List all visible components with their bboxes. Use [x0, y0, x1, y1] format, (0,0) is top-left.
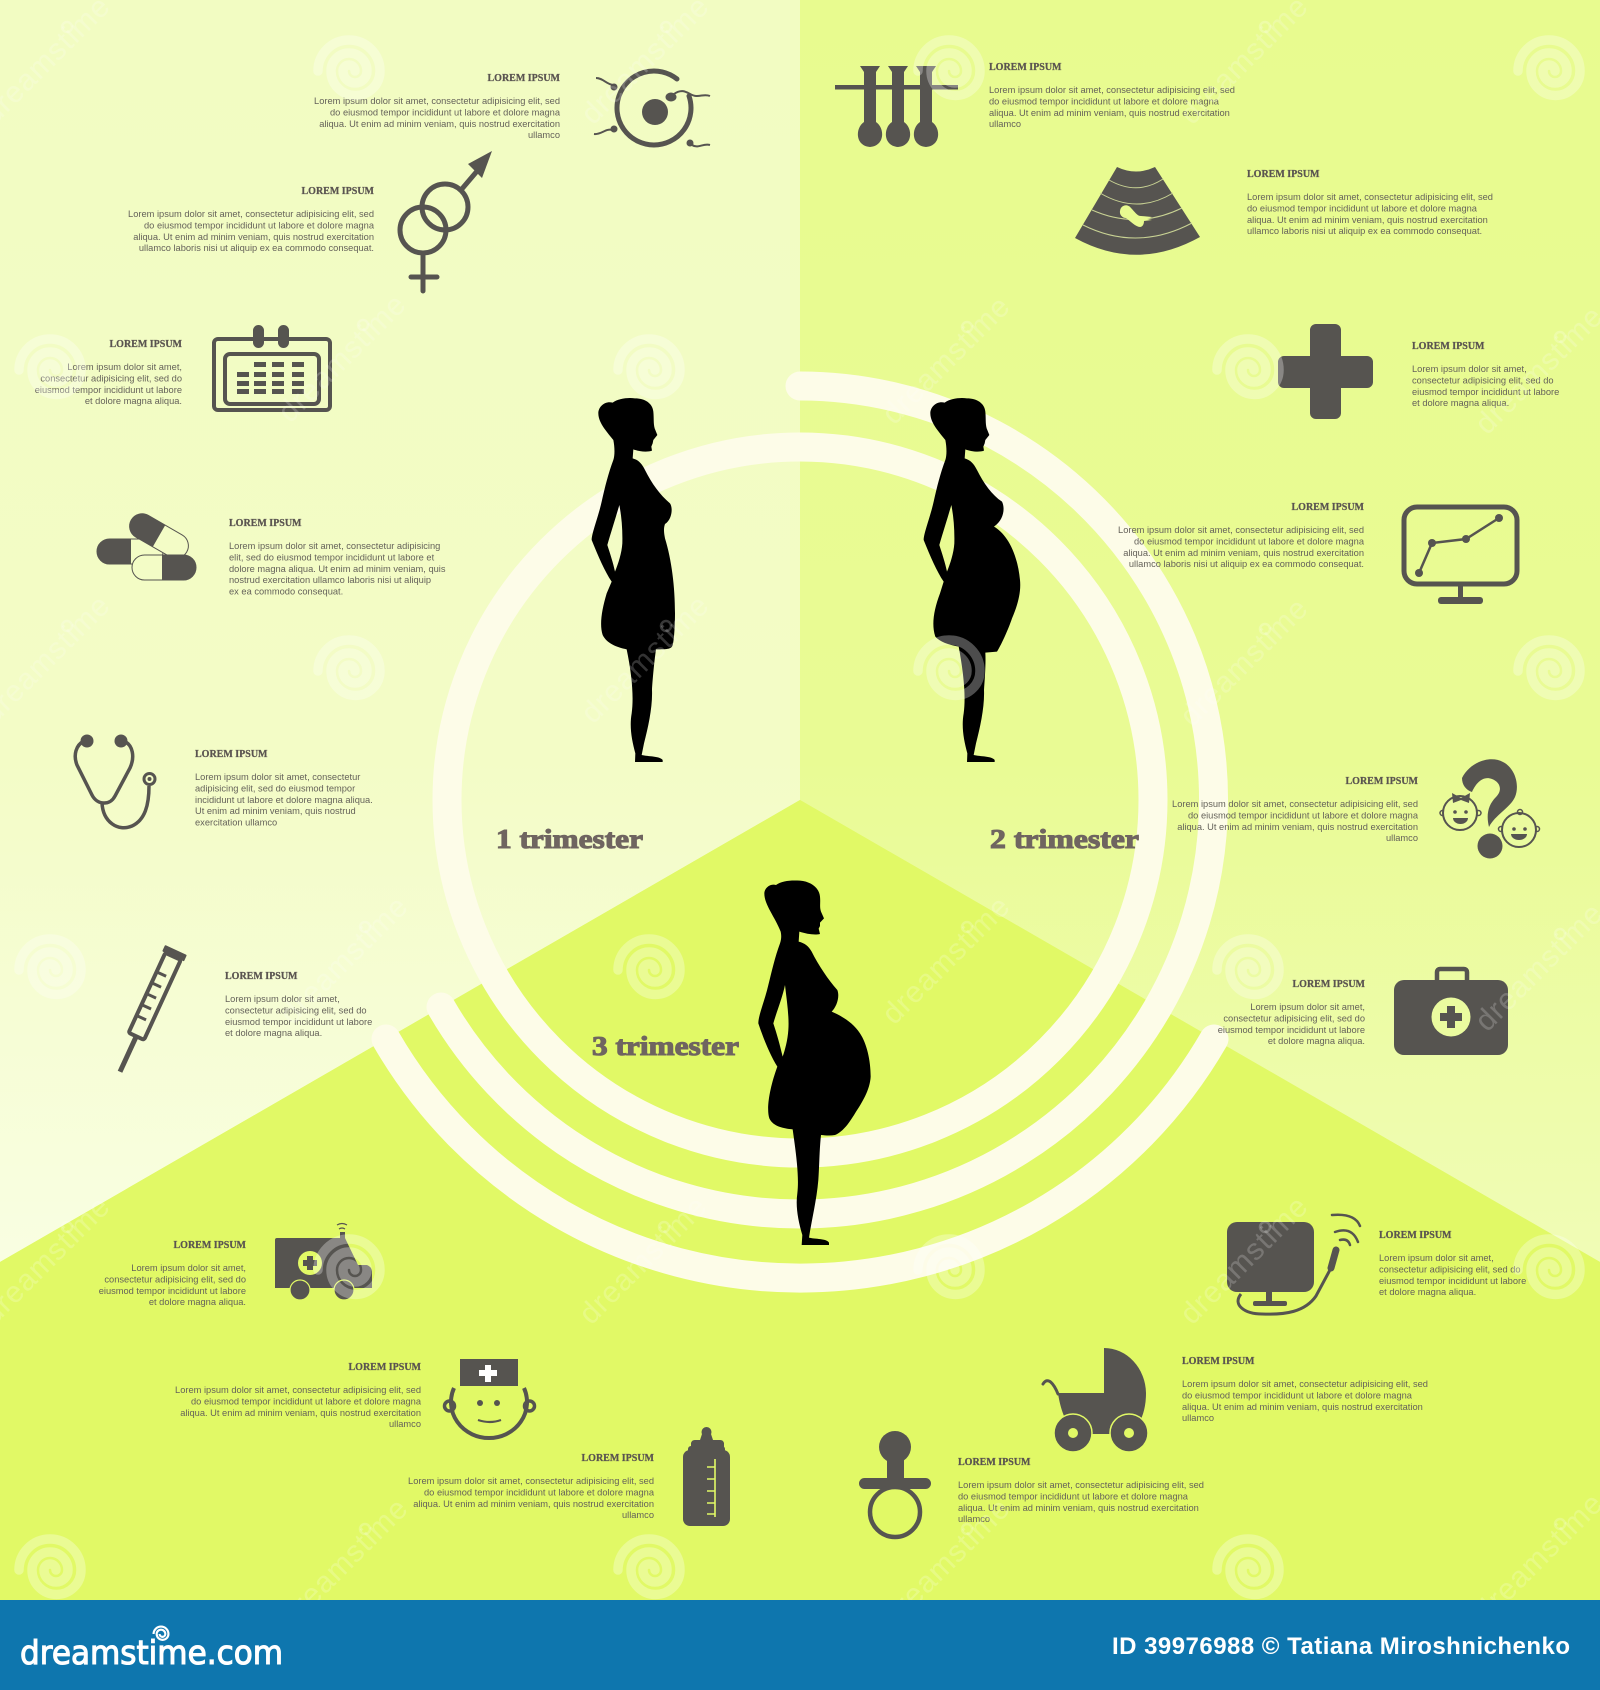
icon: gender symbols	[400, 151, 492, 291]
text block: syringe: consectetur adipisicing elit, sed do	[225, 1005, 367, 1015]
panel: third trimester background	[0, 800, 1600, 1600]
text block: egg and sperm: do eiusmod tempor incididunt ut labore et dolore magna	[330, 107, 561, 117]
text block: ultrasound scan: LOREM IPSUM	[1247, 169, 1320, 180]
silhouette: third trimester woman	[758, 880, 871, 1245]
text block: plus cross: consectetur adipisicing elit, sed do	[1412, 375, 1554, 385]
icon: baby stroller	[1043, 1348, 1148, 1452]
text block: pacifier: do eiusmod tempor incididunt ut labore et dolore magna	[958, 1491, 1189, 1501]
text block: nurse face: aliqua. Ut enim ad minim veniam, quis nostrud exercitation	[180, 1408, 421, 1418]
text block: pills: dolore magna aliqua. Ut enim ad minim veniam, quis	[229, 564, 446, 574]
text block: stethoscope: incididunt ut labore et dolore magna aliqua.	[195, 795, 373, 805]
text block: ultrasound scan: aliqua. Ut enim ad minim veniam, quis nostrud exercitation	[1247, 215, 1488, 225]
icon: egg and sperm	[594, 71, 710, 146]
text block: ultrasound scan: do eiusmod tempor incididunt ut labore et dolore magna	[1247, 203, 1478, 213]
text block: egg and sperm: LOREM IPSUM	[488, 73, 561, 84]
text block: pills: ex ea commodo consequat.	[229, 587, 343, 597]
footer credit: ID 39976988 © Tatiana Miroshnichenko	[1112, 1633, 1570, 1660]
footer logo: dreamstime.com	[20, 1633, 283, 1672]
text block: baby bottle: ullamco	[622, 1510, 654, 1520]
footer bar	[0, 1600, 1600, 1690]
text block: medical kit: LOREM IPSUM	[1292, 979, 1366, 990]
text block: gender symbols: LOREM IPSUM	[302, 186, 375, 197]
icon: stethoscope	[75, 734, 155, 828]
text block: calendar: LOREM IPSUM	[110, 339, 183, 350]
watermark overlay: dreamstime	[1174, 1190, 1315, 1331]
text block: baby stroller: do eiusmod tempor incididunt ut labore et dolore magna	[1182, 1390, 1413, 1400]
text block: baby stroller: Lorem ipsum dolor sit amet, consectetur adipisicing elit, sed	[1182, 1379, 1428, 1389]
panel: second trimester background	[800, 0, 1600, 1262]
text block: nurse face: Lorem ipsum dolor sit amet, consectetur adipisicing elit, sed	[175, 1385, 421, 1395]
text block: question mark with babies: LOREM IPSUM	[1346, 776, 1419, 787]
text block: nurse face: ullamco	[389, 1419, 421, 1429]
panel: first trimester background	[0, 0, 800, 1262]
text block: baby bottle: LOREM IPSUM	[582, 1453, 655, 1464]
text block: question mark with babies: Lorem ipsum dolor sit amet, consectetur adipisicing elit, sed	[1172, 799, 1418, 809]
text block: screen with cable: eiusmod tempor incididunt ut labore	[1379, 1276, 1526, 1286]
icon: ultrasound scan	[1075, 167, 1200, 255]
icon: plus cross	[1278, 324, 1373, 419]
text block: plus cross: eiusmod tempor incididunt ut labore	[1412, 387, 1559, 397]
text block: syringe: eiusmod tempor incididunt ut labore	[225, 1017, 372, 1027]
text block: stethoscope: Ut enim ad minim veniam, quis nostrud	[195, 806, 356, 816]
text block: medical kit: et dolore magna aliqua.	[1268, 1036, 1365, 1046]
text block: syringe: et dolore magna aliqua.	[225, 1028, 322, 1038]
icon: screen with cable and signal	[1227, 1215, 1360, 1314]
text block: baby stroller: ullamco	[1182, 1413, 1214, 1423]
text block: screen with cable: et dolore magna aliqua.	[1379, 1287, 1476, 1297]
text block: syringe: LOREM IPSUM	[225, 971, 298, 982]
text block: monitor with chart: ullamco laboris nisi ut aliquip ex ea commodo consequat.	[1129, 559, 1364, 569]
text block: pacifier: aliqua. Ut enim ad minim veniam, quis nostrud exercitation	[958, 1503, 1199, 1513]
text block: pills: Lorem ipsum dolor sit amet, consectetur adipisicing	[229, 541, 440, 551]
watermark overlay: dreamstime	[274, 1492, 415, 1633]
icon: pacifier	[859, 1431, 931, 1537]
text block: gender symbols: aliqua. Ut enim ad minim veniam, quis nostrud exercitation	[133, 232, 374, 242]
text block: calendar: Lorem ipsum dolor sit amet,	[67, 362, 182, 372]
text block: ambulance: Lorem ipsum dolor sit amet,	[131, 1263, 246, 1273]
text block: stethoscope: adipisicing elit, sed do eiusmod tempor	[195, 783, 355, 793]
text block: test tubes: do eiusmod tempor incididunt ut labore et dolore magna	[989, 96, 1220, 106]
text block: test tubes: LOREM IPSUM	[989, 62, 1062, 73]
watermark overlay: dreamstime	[876, 1492, 1017, 1633]
text block: stethoscope: Lorem ipsum dolor sit amet, consectetur	[195, 772, 360, 782]
text block: screen with cable: consectetur adipisicing elit, sed do	[1379, 1264, 1521, 1274]
icon: medical kit	[1394, 969, 1508, 1055]
text block: egg and sperm: ullamco	[528, 130, 560, 140]
text block: baby bottle: Lorem ipsum dolor sit amet, consectetur adipisicing elit, sed	[408, 1476, 654, 1486]
text block: gender symbols: do eiusmod tempor incididunt ut labore et dolore magna	[144, 220, 375, 230]
text block: pacifier: ullamco	[958, 1514, 990, 1524]
watermark overlay: dreamstime	[575, 589, 716, 730]
text block: nurse face: do eiusmod tempor incididunt ut labore et dolore magna	[191, 1396, 422, 1406]
text block: ultrasound scan: Lorem ipsum dolor sit amet, consectetur adipisicing elit, sed	[1247, 192, 1493, 202]
icon: nurse face	[444, 1359, 534, 1438]
text block: monitor with chart: aliqua. Ut enim ad minim veniam, quis nostrud exercitation	[1123, 548, 1364, 558]
text block: monitor with chart: Lorem ipsum dolor sit amet, consectetur adipisicing elit, sed	[1118, 525, 1364, 535]
text block: screen with cable: LOREM IPSUM	[1379, 1230, 1452, 1241]
text block: monitor with chart: LOREM IPSUM	[1292, 502, 1365, 513]
text block: egg and sperm: Lorem ipsum dolor sit amet, consectetur adipisicing elit, sed	[314, 96, 560, 106]
text block: pills: nostrud exercitation ullamco laboris nisi ut aliquip	[229, 575, 431, 585]
text block: pills: LOREM IPSUM	[229, 518, 302, 529]
icon: ambulance	[275, 1224, 372, 1300]
watermark overlay: dreamstime	[876, 890, 1017, 1031]
silhouette: first trimester woman	[592, 398, 675, 762]
watermark overlay: dreamstime	[876, 290, 1017, 431]
icon: syringe	[109, 945, 187, 1077]
text block: question mark with babies: do eiusmod tempor incididunt ut labore et dolore magna	[1188, 810, 1419, 820]
text block: pacifier: Lorem ipsum dolor sit amet, consectetur adipisicing elit, sed	[958, 1480, 1204, 1490]
text block: baby bottle: do eiusmod tempor incididunt ut labore et dolore magna	[424, 1487, 655, 1497]
text block: medical kit: eiusmod tempor incididunt ut labore	[1218, 1025, 1365, 1035]
icon: test tubes	[835, 66, 958, 147]
text block: ambulance: LOREM IPSUM	[174, 1240, 247, 1251]
watermark overlay: dreamstime	[272, 288, 413, 429]
text block: plus cross: Lorem ipsum dolor sit amet,	[1412, 364, 1527, 374]
text block: question mark with babies: ullamco	[1386, 833, 1418, 843]
text block: pacifier: LOREM IPSUM	[958, 1457, 1031, 1468]
text block: ambulance: consectetur adipisicing elit, sed do	[104, 1274, 246, 1284]
text block: ambulance: et dolore magna aliqua.	[149, 1297, 246, 1307]
watermark overlay: dreamstime	[573, 1190, 714, 1331]
text block: pills: elit, sed do eiusmod tempor incididunt ut labore et	[229, 552, 435, 562]
watermark overlay: dreamstime	[1174, 592, 1315, 733]
label: 2 trimester: 2 trimester	[990, 824, 1139, 854]
text block: screen with cable: Lorem ipsum dolor sit amet,	[1379, 1253, 1494, 1263]
text block: syringe: Lorem ipsum dolor sit amet,	[225, 994, 340, 1004]
text block: calendar: et dolore magna aliqua.	[85, 396, 182, 406]
text block: calendar: consectetur adipisicing elit, sed do	[40, 373, 182, 383]
text block: test tubes: aliqua. Ut enim ad minim veniam, quis nostrud exercitation	[989, 108, 1230, 118]
text block: plus cross: LOREM IPSUM	[1412, 341, 1485, 352]
text block: gender symbols: ullamco laboris nisi ut aliquip ex ea commodo consequat.	[139, 243, 374, 253]
text block: ultrasound scan: ullamco laboris nisi ut aliquip ex ea commodo consequat.	[1247, 226, 1482, 236]
text block: monitor with chart: do eiusmod tempor incididunt ut labore et dolore magna	[1134, 536, 1365, 546]
progress rings	[386, 386, 1214, 1278]
text block: nurse face: LOREM IPSUM	[348, 1362, 422, 1373]
text block: baby stroller: aliqua. Ut enim ad minim veniam, quis nostrud exercitation	[1182, 1402, 1423, 1412]
watermark overlay: dreamstime	[274, 890, 415, 1031]
text block: stethoscope: LOREM IPSUM	[195, 749, 268, 760]
icon: pills	[97, 509, 196, 580]
silhouette: second trimester woman	[924, 398, 1020, 762]
text block: question mark with babies: aliqua. Ut enim ad minim veniam, quis nostrud exercitation	[1177, 822, 1418, 832]
label: 3 trimester: 3 trimester	[592, 1031, 739, 1061]
text block: plus cross: et dolore magna aliqua.	[1412, 398, 1509, 408]
icon: question mark with babies	[1440, 759, 1540, 858]
text block: gender symbols: Lorem ipsum dolor sit amet, consectetur adipisicing elit, sed	[128, 209, 374, 219]
text block: calendar: eiusmod tempor incididunt ut labore	[35, 385, 182, 395]
text block: medical kit: Lorem ipsum dolor sit amet,	[1250, 1002, 1365, 1012]
text block: baby bottle: aliqua. Ut enim ad minim veniam, quis nostrud exercitation	[413, 1499, 654, 1509]
icon: calendar	[214, 325, 330, 410]
icon: baby bottle	[683, 1427, 730, 1526]
icon: monitor with chart	[1404, 507, 1517, 604]
text block: test tubes: Lorem ipsum dolor sit amet, consectetur adipisicing elit, sed	[989, 85, 1235, 95]
text block: baby stroller: LOREM IPSUM	[1182, 1356, 1255, 1367]
label: 1 trimester: 1 trimester	[496, 824, 643, 854]
text block: ambulance: eiusmod tempor incididunt ut labore	[99, 1286, 246, 1296]
text block: stethoscope: exercitation ullamco	[195, 818, 277, 828]
text block: test tubes: ullamco	[989, 119, 1021, 129]
text block: medical kit: consectetur adipisicing elit, sed do	[1223, 1013, 1365, 1023]
text block: egg and sperm: aliqua. Ut enim ad minim veniam, quis nostrud exercitation	[319, 119, 560, 129]
footer logo spiral	[154, 1627, 168, 1640]
